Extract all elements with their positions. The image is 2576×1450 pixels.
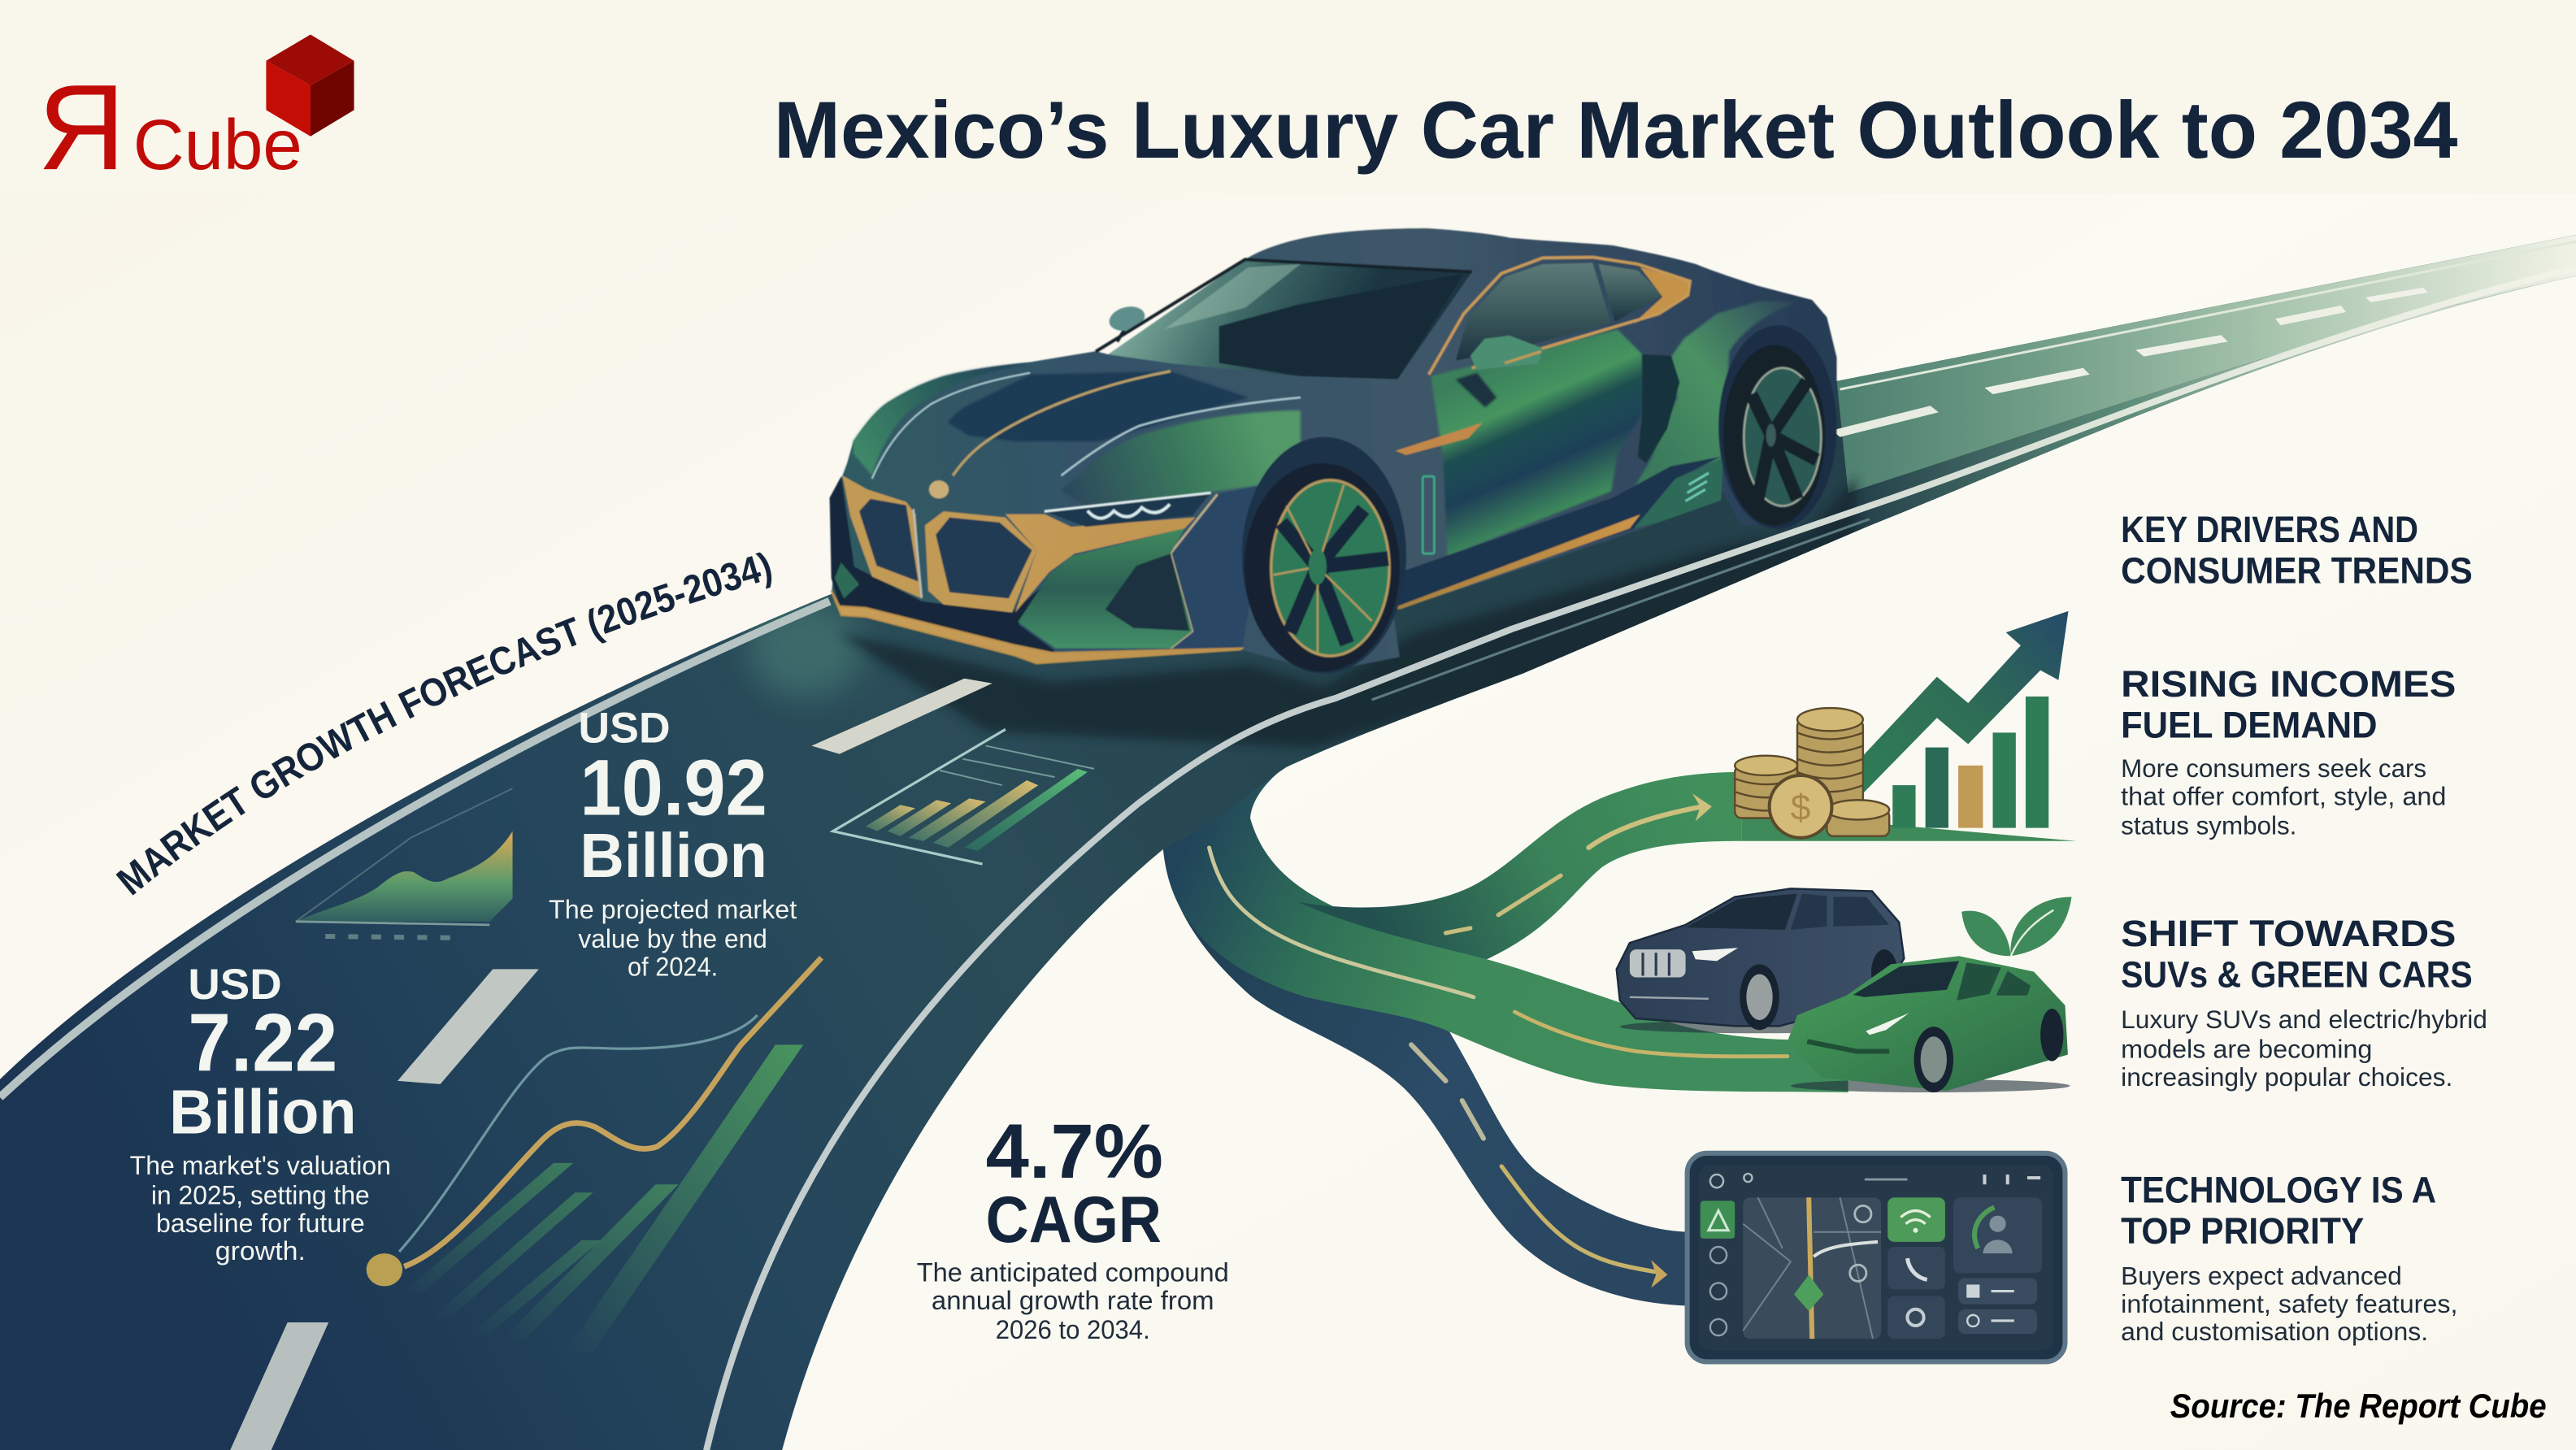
branching roads	[1163, 764, 2077, 1306]
green car	[1788, 956, 2070, 1092]
rear wheel	[1718, 325, 1837, 529]
lane dashes	[230, 288, 2428, 1450]
stat: 4.7% CAGR: annual growth rate from	[932, 1286, 1214, 1315]
icon: coins and growth chart: $	[1791, 788, 1810, 828]
windshield	[1096, 259, 1472, 379]
text block: technology priority: and customisation options.	[2121, 1318, 2428, 1346]
far mirror	[1106, 303, 1148, 341]
text block: technology priority: infotainment, safety features,	[2121, 1290, 2457, 1318]
stat: 4.7% CAGR: 2026 to 2034.	[996, 1315, 1150, 1344]
text block: rising incomes: RISING INCOMES	[2121, 663, 2456, 705]
text block: shift towards SUVs and green cars: Luxury SUVs and electric/hybrid	[2121, 1005, 2487, 1034]
car body	[830, 228, 1837, 672]
icon: SUV and green car	[1617, 888, 2072, 1092]
coin stacks	[1735, 708, 1889, 838]
text block: rising incomes: that offer comfort, style, and	[2121, 782, 2446, 810]
left grille	[842, 475, 922, 598]
emblem	[929, 480, 949, 498]
stat: 4.7% CAGR: CAGR	[986, 1183, 1162, 1257]
stat: USD 10.92 Billion: Billion	[580, 821, 767, 891]
heading: key drivers: CONSUMER TRENDS	[2121, 549, 2473, 591]
text block: technology priority: TECHNOLOGY IS A	[2121, 1169, 2436, 1210]
phone tile	[1887, 1247, 1945, 1290]
stat: 4.7% CAGR	[917, 1109, 1229, 1344]
stat: USD 7.22 Billion: The market's valuation	[130, 1151, 391, 1180]
logo: RCube: Я	[37, 59, 125, 195]
text block: shift towards SUVs and green cars: SUVs & GREEN CARS	[2121, 954, 2473, 996]
heading: key drivers	[2121, 509, 2473, 591]
chart: rising bars on road	[833, 729, 1094, 864]
stat: USD 7.22 Billion: in 2025, setting the	[151, 1180, 370, 1209]
title: Mexico’s Luxury Car Market Outlook to 2034	[774, 85, 2457, 175]
text block: technology priority: Buyers expect advanced	[2121, 1261, 2402, 1290]
stat: USD 7.22 Billion: growth.	[215, 1236, 306, 1265]
fender green	[1062, 410, 1301, 510]
headlight	[1045, 493, 1211, 527]
lower-left green	[835, 562, 859, 598]
text block: rising incomes	[2121, 663, 2456, 840]
text block: technology priority	[2121, 1169, 2457, 1346]
icon: coins and growth chart	[1735, 611, 2068, 838]
bars	[1892, 785, 1916, 828]
stat: USD 10.92 Billion	[549, 705, 797, 982]
intake	[1106, 554, 1189, 631]
text block: technology priority: TOP PRIORITY	[2121, 1210, 2364, 1252]
stat: USD 7.22 Billion: baseline for future	[156, 1209, 365, 1238]
lane markings	[1209, 806, 1788, 1273]
settings tile	[1887, 1296, 1945, 1339]
text block: rising incomes: More consumers seek cars	[2121, 754, 2426, 783]
road branch: technology	[1163, 849, 1692, 1306]
right grille	[925, 511, 1036, 612]
lower front dark	[830, 476, 1055, 662]
illustration: luxury sports car	[830, 228, 1837, 674]
profile tile	[1953, 1197, 2042, 1273]
near mirror	[1470, 336, 1543, 370]
stat: USD 10.92 Billion: value by the end	[578, 924, 767, 953]
stat: USD 7.22 Billion: USD	[188, 961, 282, 1009]
side menu	[1701, 1200, 1735, 1239]
hood scoop	[948, 371, 1249, 441]
charge indicator	[1423, 476, 1434, 554]
stat: 4.7% CAGR: 4.7%	[986, 1109, 1163, 1195]
door panel	[1431, 329, 1642, 557]
curved label: market growth forecast: MARKET GROWTH FORECAST (2025-2034)	[115, 553, 772, 896]
top bar	[1865, 1179, 1907, 1180]
chart: area on road	[296, 788, 513, 938]
side sill	[1393, 457, 1723, 610]
mirror shadow	[1456, 373, 1497, 407]
stat: USD 10.92 Billion: The projected market	[549, 895, 797, 924]
text block: shift towards SUVs and green cars: models are becoming	[2121, 1035, 2372, 1064]
stat: USD 10.92 Billion: 10.92	[580, 743, 767, 831]
SUV	[1617, 888, 1904, 1033]
side vent	[1638, 354, 1679, 463]
gold headlight band	[1006, 514, 1196, 612]
icon: infotainment tablet	[1688, 1153, 2065, 1361]
stat: USD 10.92 Billion: of 2024.	[628, 953, 718, 982]
wifi tile	[1887, 1197, 1945, 1242]
road surface shading	[748, 235, 2576, 748]
left fender green	[854, 363, 1030, 475]
logo: RCube: Cube	[133, 106, 302, 185]
front wheel	[1242, 437, 1406, 674]
text block: rising incomes: status symbols.	[2121, 812, 2296, 840]
leaves	[1961, 911, 2011, 956]
text block: rising incomes: FUEL DEMAND	[2121, 704, 2377, 745]
stat: USD 10.92 Billion: USD	[578, 705, 671, 753]
heading: key drivers: KEY DRIVERS AND	[2121, 509, 2418, 550]
stat: USD 7.22 Billion: 7.22	[188, 998, 337, 1089]
side windows	[1429, 257, 1690, 375]
control tiles	[1958, 1278, 2037, 1334]
map tile	[1743, 1197, 1881, 1339]
door handle	[1396, 423, 1483, 455]
chart: growth line with green bars	[367, 957, 822, 1352]
front green panel	[1018, 528, 1192, 649]
text block: shift towards SUVs and green cars: increasingly popular choices.	[2121, 1063, 2452, 1092]
hood creases	[872, 371, 1301, 479]
text block: shift towards SUVs and green cars: SHIFT TOWARDS	[2121, 913, 2456, 954]
stat: USD 7.22 Billion	[130, 961, 391, 1265]
rear fender and quarter panel	[1634, 302, 1800, 488]
road branch: SUVs and green cars	[1163, 764, 1848, 1092]
gold bumper trim	[832, 591, 1242, 664]
source credit: Source: The Report Cube	[2170, 1387, 2547, 1425]
stat: USD 7.22 Billion: Billion	[169, 1078, 357, 1148]
growth arrow	[1863, 611, 2068, 793]
front quarter navy	[1171, 484, 1264, 649]
road branch: rising incomes	[1298, 772, 1741, 959]
stat: 4.7% CAGR: The anticipated compound	[917, 1257, 1229, 1287]
text block: shift towards SUVs and green cars	[2121, 913, 2487, 1092]
logo: RCube	[37, 34, 354, 195]
